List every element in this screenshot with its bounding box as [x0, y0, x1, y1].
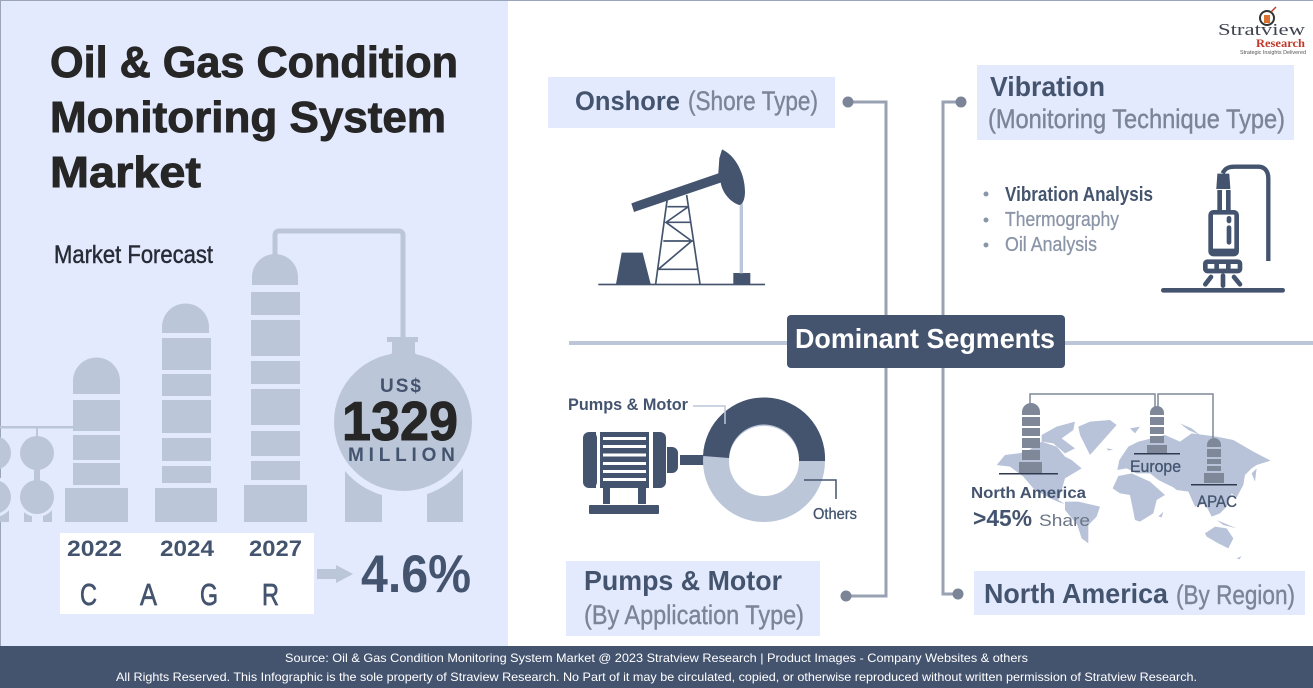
icon: small spheres and pipe [0, 426, 73, 522]
chart: tower 2024 [155, 304, 217, 522]
label: pumps and motor [566, 561, 820, 636]
label: pumps and motor: Pumps & Motor [584, 565, 782, 596]
label: pumps and motor share: Pumps & Motor [568, 395, 688, 414]
icon: vibration probe [1163, 167, 1283, 290]
list: monitoring techniques: Vibration Analysis [1005, 184, 1153, 206]
map labels: >45% [973, 505, 1032, 531]
logo: Stratview Research [1218, 7, 1306, 56]
chart: tower 2022 [65, 357, 128, 522]
list: monitoring techniques: Thermography [1005, 209, 1119, 231]
market value: MILLION [348, 445, 460, 466]
tower: APAC [1191, 438, 1237, 486]
list: monitoring techniques: Oil Analysis [1005, 234, 1097, 256]
market value [342, 376, 460, 466]
panel: years and CAGR: A [140, 577, 157, 612]
title: Market [50, 148, 201, 197]
panel: left market forecast [0, 0, 508, 646]
heading: dominant segments [787, 315, 1065, 368]
logo: Stratview Research: Strategic Insights Delivered [1240, 50, 1306, 56]
market value: 1329 [342, 390, 458, 452]
map labels: North America [971, 485, 1086, 502]
label: vibration: Vibration [990, 71, 1105, 102]
map: africa eurasia and australia [1113, 423, 1271, 559]
panel: years and CAGR: 2024 [160, 536, 215, 561]
market value: US$ [380, 376, 423, 397]
label: onshore [548, 77, 835, 128]
logo: Stratview Research: Stratview [1218, 20, 1306, 39]
map labels: Europe [1130, 457, 1181, 476]
map: americas and greenland [997, 420, 1117, 543]
title: Monitoring System [50, 93, 446, 142]
CAGR value: 4.6% [361, 545, 471, 604]
panel: years and CAGR: R [262, 577, 279, 612]
connector lines [569, 96, 1313, 602]
connectors [1030, 394, 1213, 438]
panel: years and CAGR: C [80, 577, 97, 612]
page border [0, 0, 1313, 1]
label: vibration [977, 65, 1294, 140]
footer: All Rights Reserved. This Infographic is the sole property of Straview Research. No Part of it may be circulated, copied, or otherwise reproduced without written permission of Stratview Research. [116, 670, 1197, 684]
map labels [971, 457, 1237, 531]
footer [0, 646, 1313, 688]
panel: years and CAGR: 2027 [249, 536, 302, 561]
arrow: to CAGR value [317, 565, 353, 583]
map labels: Share [1039, 511, 1090, 530]
label: onshore: Onshore [575, 86, 680, 116]
list: monitoring techniques [984, 184, 1153, 256]
title [50, 38, 458, 197]
panel: years and CAGR: G [200, 577, 218, 612]
icon: pump jack [598, 149, 765, 285]
tower: North America [999, 403, 1058, 474]
icon: storage tank with pipe [275, 231, 479, 522]
panel: years and CAGR: 2022 [67, 536, 122, 561]
subheading: market forecast: Market Forecast [54, 241, 213, 269]
label: pumps and motor: (By Application Type) [584, 600, 804, 630]
logo: Stratview Research: Research [1256, 36, 1305, 50]
footer: Source: Oil & Gas Condition Monitoring System Market @ 2023 Stratview Research | Product Images - Company Websites & others [285, 651, 1028, 665]
tower: Europe [1134, 406, 1180, 454]
label: north america [974, 571, 1305, 615]
chart: donut [703, 397, 825, 509]
icon: motor [583, 432, 704, 514]
label: onshore: (Shore Type) [688, 86, 818, 116]
title: Oil & Gas Condition [50, 38, 458, 87]
label: pumps and motor share [568, 395, 725, 424]
map labels: APAC [1197, 492, 1237, 511]
diagram: pump motor [568, 395, 857, 523]
chart: world map with region towers [971, 394, 1271, 559]
heading: dominant segments: Dominant Segments [795, 323, 1055, 354]
label: others share: Others [813, 506, 857, 523]
panel: years and CAGR [60, 533, 314, 614]
chart: tower 2027 [244, 254, 307, 522]
label: north america: North America [984, 578, 1168, 609]
label: others share [804, 480, 857, 523]
